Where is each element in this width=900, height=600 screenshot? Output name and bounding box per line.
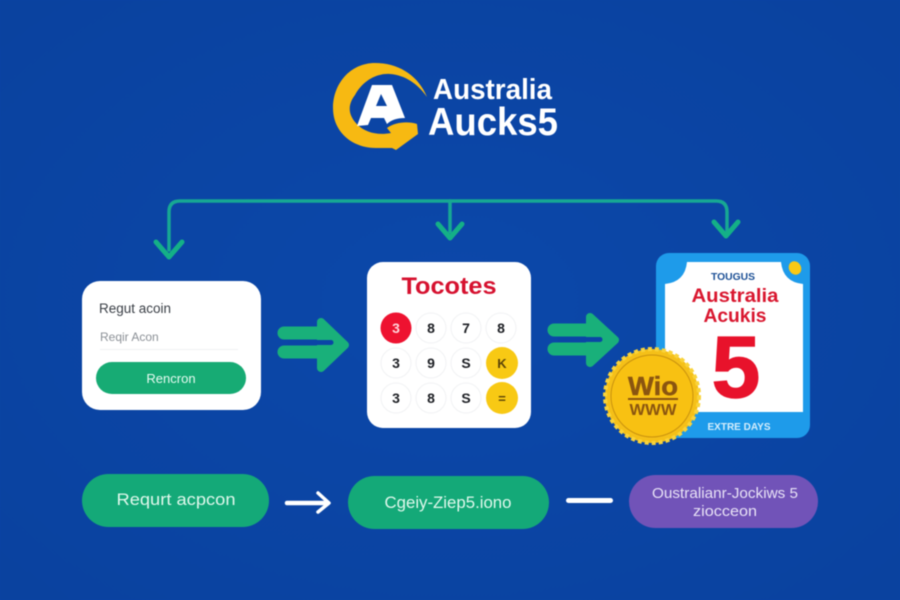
badge lower word: WWW xyxy=(630,402,677,419)
number balls: 8 xyxy=(497,320,505,336)
input label: Reqir Acon xyxy=(100,330,159,344)
number balls xyxy=(380,312,518,414)
logo xyxy=(333,63,558,150)
grid title: Tocotes xyxy=(402,273,496,300)
step pill: first xyxy=(82,474,269,527)
icon: white letter A xyxy=(357,85,405,126)
arrow: card 2 to card 3 xyxy=(554,317,615,363)
ticket footer: EXTRE DAYS xyxy=(708,422,771,433)
ticket small heading: TOUGUS xyxy=(711,272,755,283)
number balls: 3 xyxy=(392,390,400,406)
number balls: = xyxy=(498,391,506,406)
step pill: second: Cgeiy-Ziep5.iono xyxy=(384,494,512,512)
badge word: Wio xyxy=(628,371,678,401)
button xyxy=(96,362,246,394)
number balls: 3 xyxy=(392,355,400,371)
number balls: 8 xyxy=(427,390,435,406)
number balls: 7 xyxy=(462,320,470,336)
arrow: pill 1 to pill 2 xyxy=(287,493,329,512)
logo line: Australia: Australia xyxy=(433,74,553,106)
connector arrows: top branch xyxy=(156,201,738,257)
ticket title: Australia xyxy=(692,285,779,307)
arrow: card 1 to card 2 xyxy=(284,322,345,368)
panel: registration card xyxy=(82,281,261,410)
number balls: 3 xyxy=(392,320,400,336)
card heading: Regut acoin xyxy=(99,301,171,316)
number balls: S xyxy=(461,390,471,406)
arrowhead: left xyxy=(156,242,182,257)
ticket corner dot xyxy=(786,259,804,277)
step pill: second xyxy=(348,476,549,529)
ticket large number 5: 5 xyxy=(712,319,760,416)
ticket inner sheet xyxy=(665,262,803,412)
badge: win seal xyxy=(605,349,699,443)
step pill: third xyxy=(629,475,818,528)
panel: lottery ticket: Acukis xyxy=(704,306,766,327)
icon: yellow crescent with arrow xyxy=(333,63,427,150)
connector line: pill 2 to pill 3 xyxy=(566,498,613,503)
arrowhead: middle xyxy=(438,224,462,238)
number balls: 8 xyxy=(427,320,435,336)
arrowhead: right xyxy=(714,222,738,236)
panel: ticket number grid xyxy=(367,262,531,428)
step pill: first: Requrt acpcon xyxy=(116,490,236,509)
number balls: S xyxy=(461,355,471,371)
step pill: third: ziocceon xyxy=(693,504,757,520)
number balls: 9 xyxy=(427,355,435,371)
logo line: Aucks5: Aucks5 xyxy=(428,101,558,144)
button: Rencron xyxy=(146,371,196,386)
step pill: third: Oustralianr-Jockiws 5 xyxy=(652,486,798,502)
panel: lottery ticket xyxy=(656,253,810,438)
number balls: K xyxy=(497,356,507,371)
